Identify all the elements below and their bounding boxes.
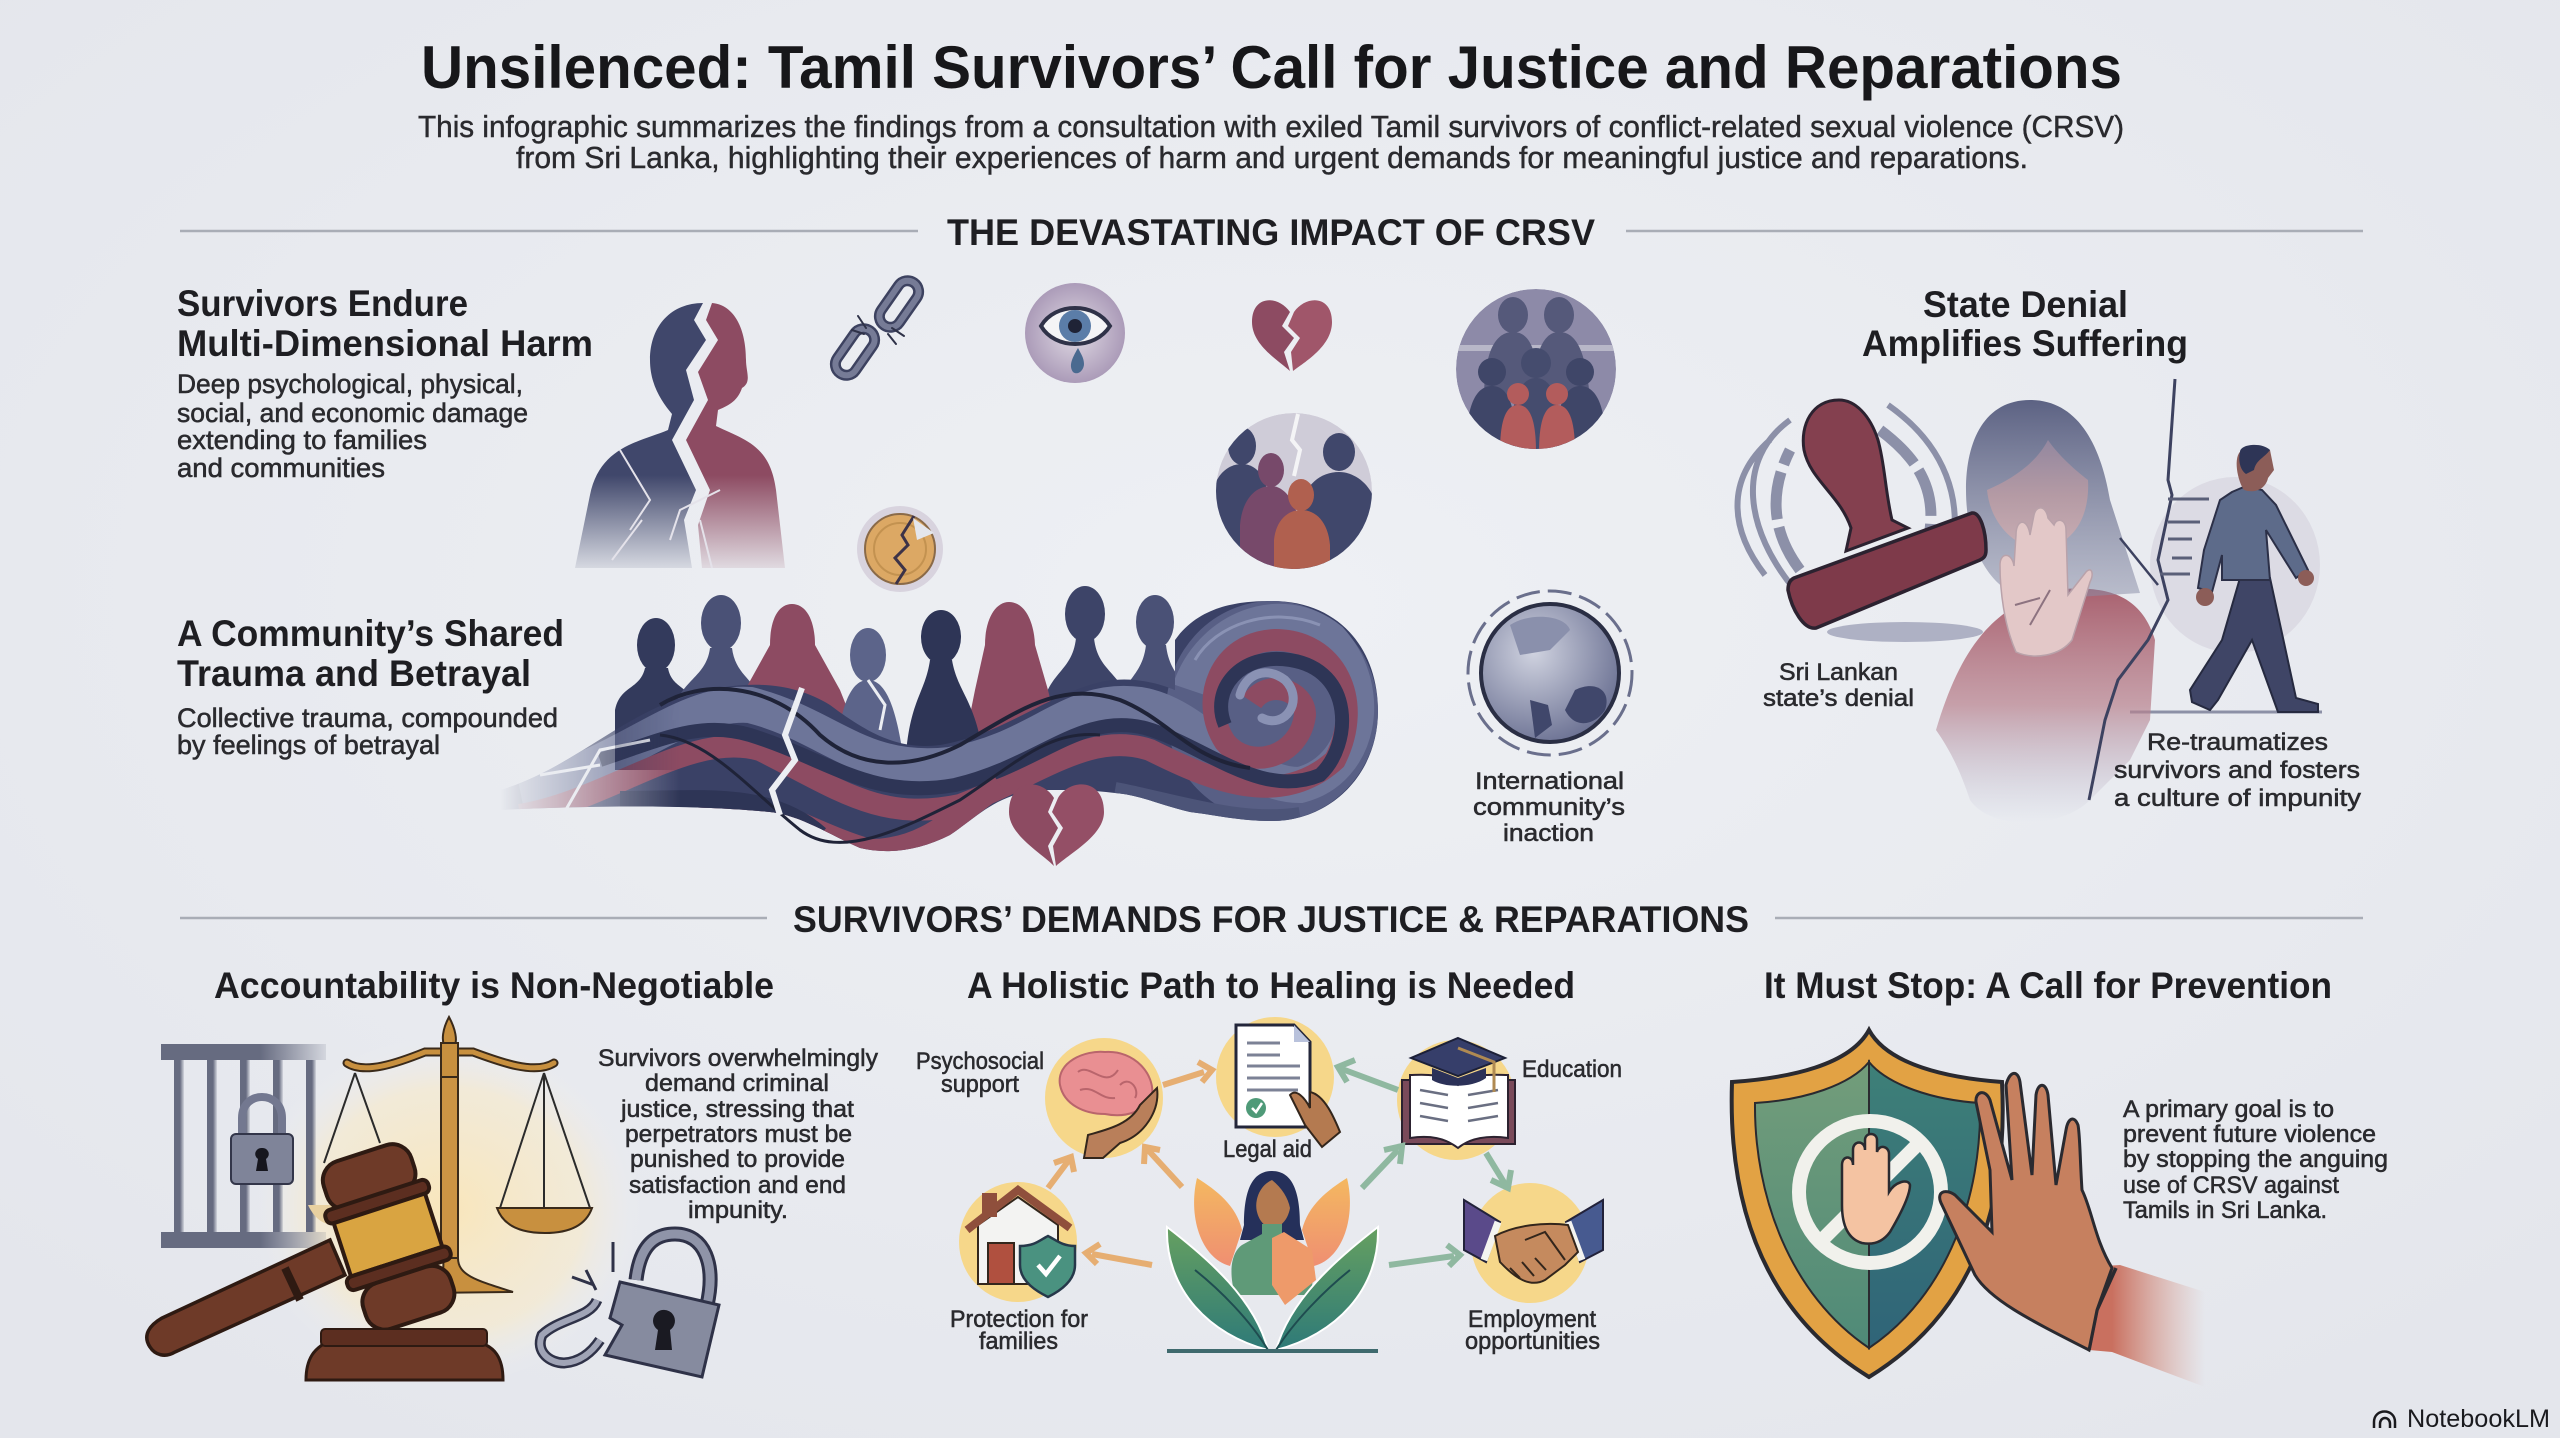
label: international inaction: International	[1475, 768, 1624, 795]
icon: shield	[1732, 1030, 2003, 1377]
node: employment: Employment	[1468, 1306, 1596, 1333]
NotebookLM logo: NotebookLM	[2407, 1405, 2550, 1433]
illustration: crowd silhouettes	[615, 586, 1200, 770]
text block	[598, 1045, 878, 1224]
icon: broken coin	[857, 506, 943, 592]
text block: A primary goal is to	[2123, 1096, 2334, 1123]
icon: broken heart	[1252, 300, 1332, 371]
panel: community shared trauma text: Trauma and Betrayal	[177, 653, 531, 694]
illustration: trauma waves and spiral	[508, 601, 1378, 852]
section heading: impact: THE DEVASTATING IMPACT OF CRSV	[947, 212, 1595, 253]
label: sri lankan state's denial	[1763, 659, 1914, 712]
intro text	[418, 109, 2124, 175]
heading: Accountability is Non-Negotiable	[214, 965, 774, 1006]
panel: accountability	[147, 965, 878, 1385]
text block: demand criminal	[645, 1070, 829, 1097]
crack line and motion marks	[2089, 379, 2209, 800]
panel: multi-dimensional harm text: extending to families	[177, 425, 427, 455]
heading: It Must Stop: A Call for Prevention	[1764, 965, 2332, 1006]
label: re-traumatizes survivors: survivors and fosters	[2114, 757, 2360, 784]
node: legal aid	[1216, 1017, 1340, 1163]
panel: multi-dimensional harm text: and communities	[177, 453, 385, 483]
icon: family circle top right	[1450, 289, 1622, 452]
icon: denial stamp	[1738, 400, 1986, 642]
node: employment: opportunities	[1465, 1328, 1600, 1355]
label: re-traumatizes survivors: Re-traumatizes	[2147, 729, 2328, 756]
icon: broken padlock	[540, 1234, 719, 1377]
panel: community shared trauma text: A Community’s Shared	[177, 613, 564, 654]
panel: multi-dimensional harm text: social, and economic damage	[177, 398, 528, 428]
icon: gavel	[147, 1137, 503, 1380]
icon: prison bars with lock	[161, 1044, 326, 1248]
text block: punished to provide	[630, 1146, 845, 1173]
label: re-traumatizes survivors	[2114, 729, 2361, 812]
panel: community shared trauma text	[177, 613, 564, 760]
node: psychosocial support	[916, 1038, 1163, 1158]
panel: community shared trauma text: Collective trauma, compounded	[177, 703, 558, 733]
text block: impunity.	[688, 1197, 788, 1224]
node: protection for families: Protection for	[950, 1306, 1088, 1333]
label: sri lankan state's denial: state’s denial	[1763, 685, 1914, 712]
text block: Tamils in Sri Lanka.	[2123, 1197, 2327, 1224]
node: employment	[1464, 1183, 1603, 1355]
arrows	[1048, 1060, 1511, 1266]
text block: by stopping the anguing	[2123, 1146, 2388, 1173]
panel: multi-dimensional harm text: Multi-Dimensional Harm	[177, 323, 593, 364]
icon: fractured family circle	[1216, 413, 1372, 569]
panel: multi-dimensional harm text: Survivors Endure	[177, 283, 468, 324]
label: re-traumatizes survivors: a culture of impunity	[2114, 785, 2361, 812]
illustration: woman with raised hand	[1936, 400, 2155, 822]
label: international inaction: inaction	[1503, 820, 1594, 847]
text block	[2123, 1096, 2388, 1224]
node: psychosocial support: Psychosocial	[916, 1048, 1044, 1075]
label: sri lankan state's denial: Sri Lankan	[1779, 659, 1898, 686]
label: international inaction	[1473, 768, 1625, 847]
panel: community shared trauma text: by feelings of betrayal	[177, 730, 440, 760]
text block: use of CRSV against	[2123, 1172, 2339, 1199]
icon: fractured person	[575, 303, 785, 568]
panel: state denial heading	[1862, 284, 2188, 364]
node: protection for families	[950, 1182, 1088, 1355]
icon: broken heart on wave	[1009, 784, 1104, 866]
node: psychosocial support: support	[941, 1071, 1019, 1098]
node: protection for families: families	[979, 1328, 1058, 1355]
panel: multi-dimensional harm text: Deep psychological, physical,	[177, 369, 523, 399]
icon: raised hand with sleeve	[1940, 1073, 2205, 1387]
panel: holistic path	[916, 965, 1622, 1355]
node: education: Education	[1522, 1056, 1622, 1083]
panel: state denial heading: State Denial	[1923, 284, 2128, 325]
icon: eye with tear	[1025, 283, 1125, 383]
text block: prevent future violence	[2123, 1121, 2376, 1148]
heading: A Holistic Path to Healing is Needed	[967, 965, 1575, 1006]
panel: state denial heading: Amplifies Suffering	[1862, 323, 2188, 364]
label: international inaction: community’s	[1473, 794, 1625, 821]
node: education	[1397, 1038, 1622, 1160]
text block: Survivors overwhelmingly	[598, 1045, 878, 1072]
section heading: demands: SURVIVORS’ DEMANDS FOR JUSTICE & REPARATIONS	[793, 899, 1749, 940]
icon: globe	[1468, 591, 1632, 755]
panel: multi-dimensional harm text	[177, 283, 593, 483]
node: legal aid: Legal aid	[1223, 1136, 1312, 1163]
illustration: man walking away	[2130, 445, 2322, 712]
panel: prevention	[1732, 965, 2388, 1387]
text block: satisfaction and end	[629, 1172, 846, 1199]
icon: broken chain	[831, 276, 923, 380]
text block: justice, stressing that	[620, 1096, 854, 1123]
illustration: woman growing from plant	[1167, 1171, 1378, 1351]
text block: perpetrators must be	[625, 1121, 852, 1148]
intro text: from Sri Lanka, highlighting their experiences of harm and urgent demands for meaningful justice and reparations.	[516, 140, 2028, 175]
icon: scales of justice	[308, 1017, 592, 1293]
background glow	[252, 1035, 642, 1385]
title: Unsilenced: Tamil Survivors’ Call for Justice and Reparations	[421, 34, 2122, 101]
intro text: This infographic summarizes the findings from a consultation with exiled Tamil survivors of conflict-related sexual violence (CRSV)	[418, 109, 2124, 144]
